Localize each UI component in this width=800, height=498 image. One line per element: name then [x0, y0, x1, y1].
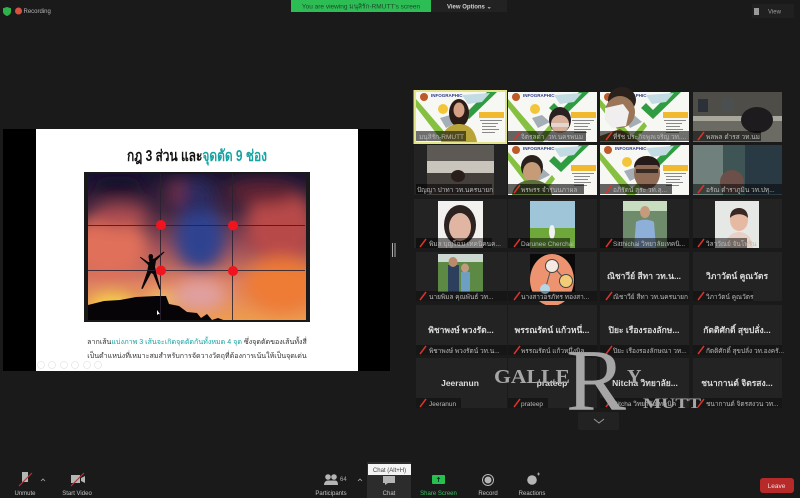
- slide caption: ลากเส้นแบ่งภาพ 3 เส้นจะเกิดจุดตัดกันทั้งหมด 4 จุด ซึ่งจุดตัดของเส้นทั้งสี่: [87, 336, 307, 346]
- shared slide panel: [3, 129, 390, 371]
- participant tile 5: [414, 145, 507, 195]
- banner: viewing screen: [291, 0, 431, 12]
- participant tile 24: ชนากานต์ จิตรสง...: [701, 378, 773, 388]
- participant tile 18: พรรณรัตน์ แก้วหนึ่งนิล...: [521, 346, 590, 355]
- watermark: Gallery RMUTT: R: [566, 333, 626, 430]
- participant tile 7: อภิรัตน์ สุระ วท.ลุ...: [613, 186, 667, 194]
- participant tile 17: พิชาพงษ์ พวงรัตน์ วท.น...: [429, 347, 500, 355]
- toolbar: participants: Participants: [315, 491, 347, 497]
- participant tile 21: Jeeranun: [429, 401, 456, 408]
- participant tile 21: [416, 358, 507, 408]
- participant tile 8: [693, 145, 782, 195]
- participant tile 17: [416, 305, 507, 355]
- participant tile 17: พิชาพงษ์ พวงรัต...: [428, 325, 494, 335]
- participant tile 11: Sitthichai วิทยาลัยเทคนิ...: [613, 240, 685, 248]
- mouse cursor: [157, 310, 160, 315]
- participant tile 10: Darunee Cherchai: [521, 241, 574, 248]
- slide controls: [38, 362, 102, 368]
- participant tile 12: วิลาวัณย์ จันโทริน: [706, 240, 757, 248]
- participant tile 15: ณิชาวีย์ สีทา วท.น...: [607, 271, 681, 281]
- leave button: Leave: [768, 483, 786, 490]
- participant tile 20: กัตติศักดิ์ สุขปลั่ง...: [703, 323, 771, 336]
- participant tile 3: [600, 87, 689, 142]
- slide title: กฎ 3 ส่วน และจุดตัด 9 ช่อง: [127, 146, 267, 165]
- participant tile 11: [600, 199, 689, 248]
- participant tile 23: Nitcha วิทยาลัย...: [612, 378, 678, 388]
- participant tile 9: [414, 199, 507, 248]
- grid lines: [88, 174, 305, 320]
- silhouette figure: [140, 252, 165, 290]
- participant tile 16: วิภาวัตน์ คูณวัตร: [706, 271, 768, 282]
- participant tile 23: [600, 358, 689, 408]
- scroll down button: [578, 412, 619, 430]
- leave button: [760, 478, 794, 493]
- participant tile 3: ที่รัช ประกิจพูลเจริญ วท....: [613, 132, 686, 141]
- toolbar: participants: [315, 474, 362, 497]
- photo with rule of thirds grid: [68, 172, 320, 329]
- top bar: security and recording status: Recording: [24, 9, 51, 15]
- participant tile 1: speaker: [414, 90, 507, 144]
- participant tile 12: [693, 199, 782, 248]
- participant tile 13: [416, 252, 507, 301]
- silhouette hill: [88, 296, 266, 329]
- participant tile 20: [693, 305, 784, 355]
- participant tile 4: [693, 92, 782, 142]
- muted microphone marks on tiles: [420, 132, 704, 407]
- participant tile 21: Jeeranun: [441, 378, 479, 388]
- view options button: View Options ⌄: [447, 4, 492, 10]
- participant tile 22: prateep: [537, 378, 567, 388]
- toolbar: chat: [367, 462, 411, 498]
- toolbar: share screen: [420, 475, 457, 497]
- slide caption: [87, 336, 307, 360]
- participant tile 10: [508, 199, 597, 248]
- participant tile 2: [508, 92, 597, 142]
- participant tile 23: Nitcha วิทยาลัยเทคนิค: [613, 400, 676, 408]
- watermark: Gallery RMUTT: GALLE: [494, 366, 570, 388]
- watermark: Gallery RMUTT: MUTT: [643, 396, 701, 412]
- view options button: [431, 0, 507, 12]
- participant tile 15: [600, 252, 689, 301]
- participant tile 13: นายพิมล คุณพันธ์ วท...: [429, 293, 494, 301]
- toolbar: chat: Chat: [383, 491, 396, 497]
- participant tile 19: ปิยะ เรืองรองลักษณา วท...: [612, 347, 687, 355]
- view button: View: [768, 10, 782, 16]
- toolbar: start video: Start Video: [62, 491, 92, 497]
- participant tile 7: [600, 145, 689, 195]
- toolbar: record: [478, 474, 498, 497]
- participant tile 2: จิตรลดา_วท.นครพนม: [521, 133, 583, 141]
- toolbar: unmute: [14, 472, 45, 497]
- banner: viewing screen: You are viewing มนุสิรัก-RMUTT's screen: [302, 2, 421, 10]
- participant tile 8: อรัณ ตำราภูมิน วท.ปทุ...: [706, 186, 775, 194]
- participant tile 1: speaker: มนุสิรัก-RMUTT: [419, 133, 464, 141]
- participant tile 6: [508, 145, 597, 195]
- watermark: Gallery RMUTT: Y: [627, 366, 642, 388]
- toolbar: start video: [62, 473, 92, 497]
- top bar: security and recording status: [3, 7, 51, 16]
- red intersection points: [156, 220, 238, 276]
- participant tile 24: [693, 358, 782, 408]
- watermark: Gallery RMUTT: [494, 333, 701, 430]
- participant tile 24: ชนากานต์ จิตรสงวน วท...: [706, 400, 779, 408]
- participant tile 16: วิภาวัตน์ คูณวัตร: [706, 293, 754, 301]
- participant tile 5: ปัญญา ปาทา วท.นครนายก: [417, 186, 493, 194]
- participant tile 6: พรพรร จำรุ่นนภาผล: [521, 186, 577, 194]
- participant tile 22: prateep: [521, 401, 543, 408]
- participant tile 9: พิมล บุญโฉม เทคนิคนค...: [429, 240, 501, 248]
- toolbar: reactions: Reactions: [519, 491, 545, 497]
- tooltip: chat shortcut: [368, 464, 411, 475]
- participant tile 16: [693, 252, 782, 301]
- panel divider handle: [392, 243, 396, 257]
- view button: [752, 4, 794, 18]
- participant tile 19: [600, 305, 689, 355]
- participant tile 14: นางสาวอรภัทร ทองสา...: [521, 293, 589, 301]
- tooltip: chat shortcut: Chat (Alt+H): [373, 468, 406, 474]
- participant tile 20: กัตติศักดิ์ สุขปลั่ง วท.องครั...: [706, 346, 784, 355]
- participant tile 15: ณิชาวีย์ สีทา วท.นครนายก: [613, 293, 688, 301]
- toolbar: share screen: Share Screen: [420, 491, 457, 497]
- participant tile 14: [508, 252, 597, 306]
- participant tile 18: พรรณรัตน์ แก้วหนึ่...: [515, 323, 589, 335]
- toolbar: reactions: [519, 472, 545, 497]
- toolbar: record: Record: [478, 491, 498, 497]
- toolbar: unmute: Unmute: [14, 491, 36, 497]
- participant tile 22: [508, 358, 597, 408]
- participant tile 19: ปิยะ เรืองรองลักษ...: [608, 325, 679, 335]
- participant tile 18: [508, 305, 597, 355]
- toolbar: participants: 64: [340, 477, 347, 483]
- participant tile 4: พลพล ตำรส วท.นม: [706, 133, 760, 141]
- slide caption: เป็นตำแหน่งที่เหมาะสมสำหรับการจัดวางวัตถุที่ต้องการเน้นให้เป็นจุดเด่น: [87, 350, 307, 360]
